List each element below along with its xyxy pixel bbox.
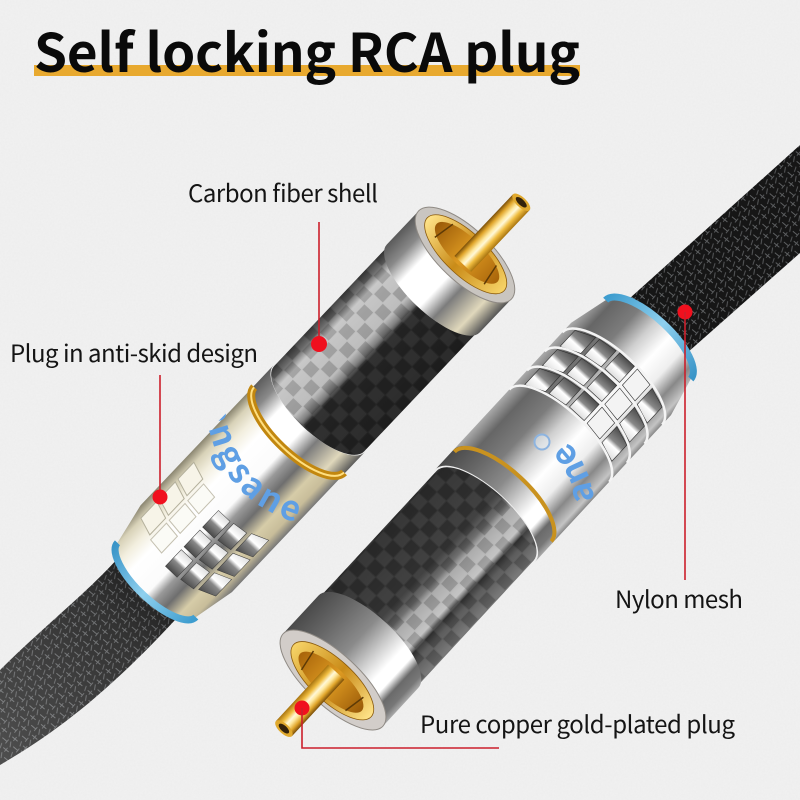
logo: left plug angsane <box>209 414 299 521</box>
title text: Self locking RCA plug <box>34 12 580 88</box>
callout: pure copper gold-plated plug <box>294 700 735 748</box>
blue rim <box>606 284 706 379</box>
gold center pin <box>454 194 530 272</box>
title underline <box>34 65 580 76</box>
cable: left braided nylon <box>0 558 175 765</box>
silver band <box>435 431 571 562</box>
carbon fiber body <box>258 246 478 469</box>
knurled anti-skid grid <box>128 462 272 606</box>
gold center pin <box>276 665 344 736</box>
front face with gold cup <box>265 615 401 745</box>
knurled anti-skid grid <box>509 313 680 482</box>
silver head <box>370 211 511 350</box>
blue rim <box>104 543 196 632</box>
callout: pure copper gold-plated plug: Pure copper gold-plated plug <box>420 705 735 740</box>
callout: plug in anti-skid design: Plug in anti-skid design <box>10 334 258 369</box>
carbon fiber body <box>320 452 551 687</box>
rear silver barrel <box>454 277 713 542</box>
silver band <box>236 365 365 491</box>
cable: right braided nylon <box>630 145 800 353</box>
rear silver barrel <box>97 387 344 638</box>
front face with gold cup <box>401 192 529 318</box>
gold ring <box>238 387 344 490</box>
plug: left RCA connector <box>96 151 568 639</box>
callout: plug in anti-skid design <box>10 334 258 504</box>
callout: carbon fiber shell: Carbon fiber shell <box>188 174 378 209</box>
logo: right plug inverted text: ane <box>556 444 594 501</box>
title <box>34 12 580 88</box>
callout: nylon mesh <box>615 304 743 615</box>
logo: left plug angsane: angsane <box>209 414 299 521</box>
plug: right RCA connector <box>233 277 713 780</box>
silver head <box>283 577 436 726</box>
callout: carbon fiber shell <box>188 174 378 352</box>
gold ring <box>454 433 569 541</box>
callout: nylon mesh: Nylon mesh <box>615 580 743 615</box>
